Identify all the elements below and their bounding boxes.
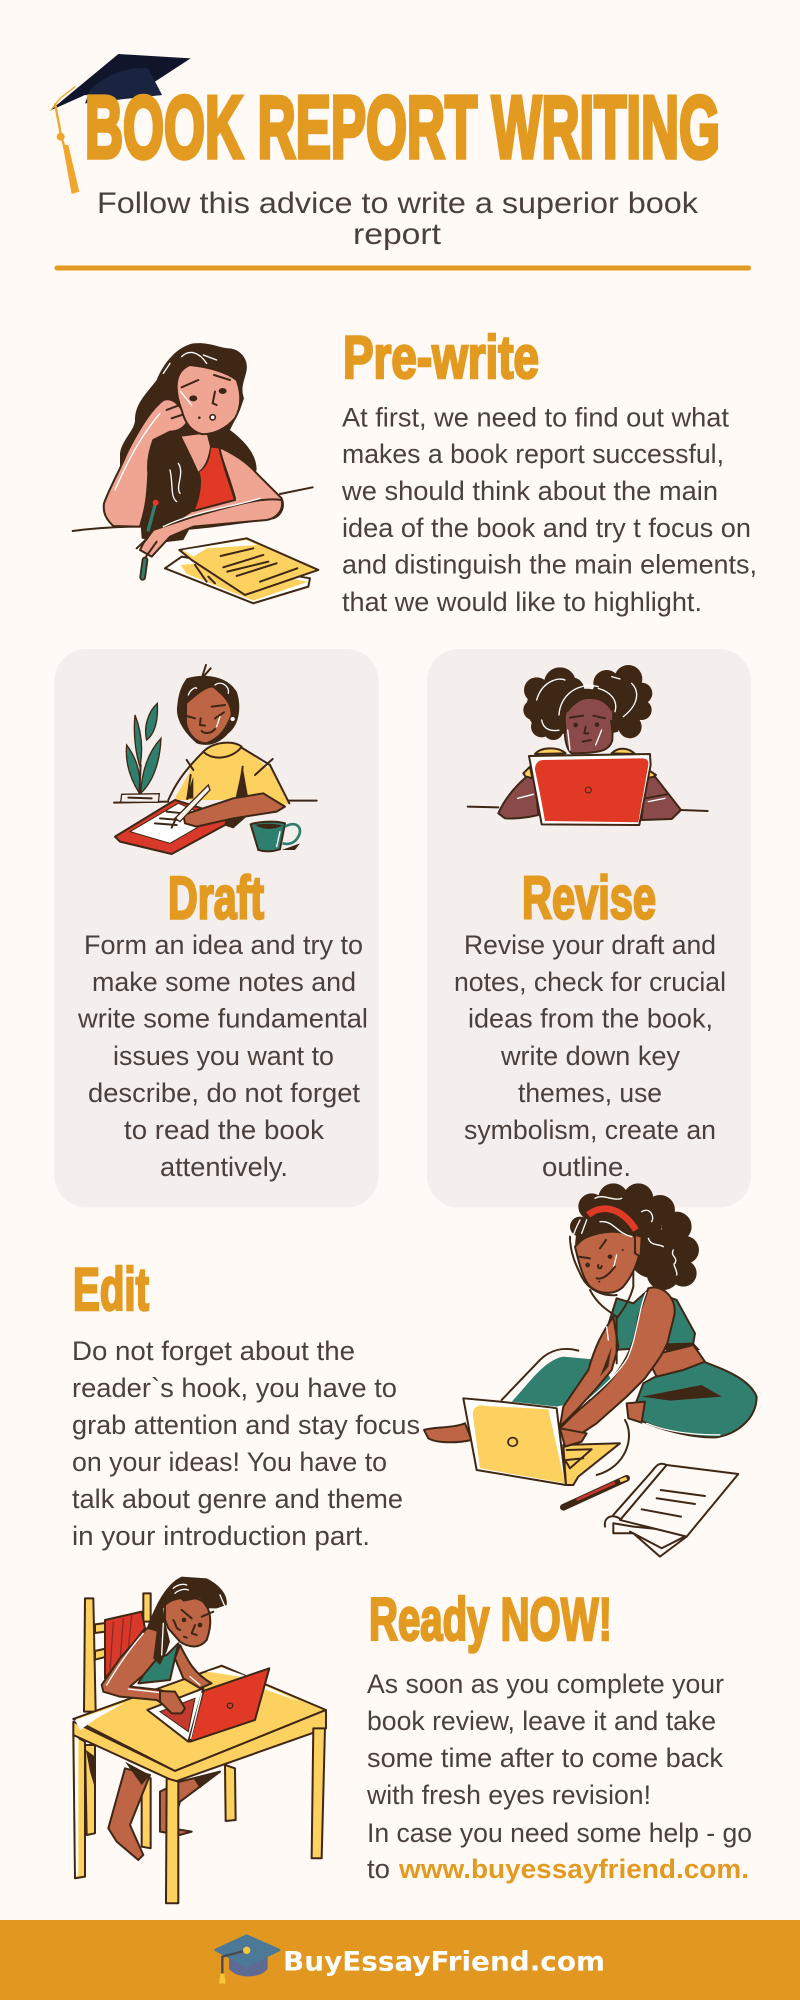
card background <box>427 649 751 1208</box>
text: edit body: Do not forget about the <box>72 1336 355 1366</box>
illustration: girl typing at yellow table <box>73 1577 326 1903</box>
illustration: writing at table <box>114 665 317 854</box>
panel: edit <box>72 1183 757 1557</box>
text: draft body: attentively. <box>160 1152 288 1182</box>
text: ready now body: As soon as you complete your <box>367 1669 724 1699</box>
text: pre-write body: idea of the book and try t focus on <box>342 513 751 543</box>
card background <box>54 649 378 1208</box>
subtitle: Follow this advice to write a superior book <box>97 187 699 220</box>
text: ready now body: book review, leave it and take <box>367 1706 716 1736</box>
text: draft body: make some notes and <box>92 967 356 997</box>
footer brand text: BuyEssayFriend.com <box>283 1946 605 1978</box>
text: draft body <box>77 930 368 1182</box>
text: draft body: describe, do not forget <box>88 1078 361 1108</box>
text: pre-write body: we should think about the main <box>341 476 718 506</box>
heading: Ready NOW!: Ready NOW! <box>369 1586 612 1653</box>
footer bar <box>0 1920 800 2000</box>
text: pre-write body: makes a book report successful, <box>342 439 724 469</box>
text: revise body: themes, use <box>518 1078 662 1108</box>
text: draft body: to read the book <box>124 1115 324 1145</box>
text: draft body: issues you want to <box>113 1041 334 1071</box>
text: ready now body <box>366 1669 752 1884</box>
icon: graduation cap <box>50 54 191 194</box>
panel: ready now <box>73 1577 752 1903</box>
illustration: girl behind red laptop <box>468 665 708 825</box>
panel: draft <box>54 649 378 1208</box>
illustration: woman sitting with yellow laptop <box>424 1183 757 1557</box>
text: edit body <box>72 1336 420 1551</box>
text: pre-write body: At first, we need to find out what <box>342 402 729 432</box>
text: edit body: grab attention and stay focus <box>72 1410 420 1440</box>
text: draft body: Form an idea and try to <box>84 930 363 960</box>
heading: Edit: Edit <box>73 1256 149 1323</box>
text: ready now body: some time after to come back <box>367 1743 723 1773</box>
text: ready now body: In case you need some help - go <box>367 1818 752 1848</box>
text: revise body: Revise your draft and <box>464 930 716 960</box>
text: edit body: reader`s hook, you have to <box>72 1373 397 1403</box>
icon: footer graduation cap <box>216 1936 279 1984</box>
text: ready now body: with fresh eyes revision! <box>366 1780 651 1810</box>
subtitle <box>97 187 699 251</box>
panel: pre-write <box>73 324 757 617</box>
text: edit body: talk about genre and theme <box>72 1484 403 1514</box>
text: revise body <box>454 930 726 1182</box>
subtitle: report <box>353 218 442 251</box>
text: pre-write body <box>341 402 757 617</box>
text: pre-write body: and distinguish the main elements, <box>342 550 757 580</box>
text: revise body: notes, check for crucial <box>454 967 726 997</box>
heading: Pre-write: Pre-write <box>343 324 539 391</box>
text: draft body: write some fundamental <box>77 1004 368 1034</box>
text: ready now body: www.buyessayfriend.com. <box>398 1854 749 1884</box>
text: revise body: symbolism, create an <box>464 1115 716 1145</box>
heading: Draft: Draft <box>168 864 264 932</box>
text: pre-write body: that we would like to highlight. <box>342 587 702 617</box>
text: revise body: ideas from the book, <box>468 1004 713 1034</box>
text: ready now body: to <box>367 1854 390 1884</box>
text: edit body: in your introduction part. <box>72 1521 370 1551</box>
text: revise body: write down key <box>500 1041 680 1071</box>
panel: revise <box>427 649 751 1208</box>
text: revise body: outline. <box>542 1152 631 1182</box>
illustration: girl thinking at desk <box>73 343 318 603</box>
heading: Revise: Revise <box>522 864 656 932</box>
text: edit body: on your ideas! You have to <box>72 1447 387 1477</box>
divider line <box>54 266 751 270</box>
